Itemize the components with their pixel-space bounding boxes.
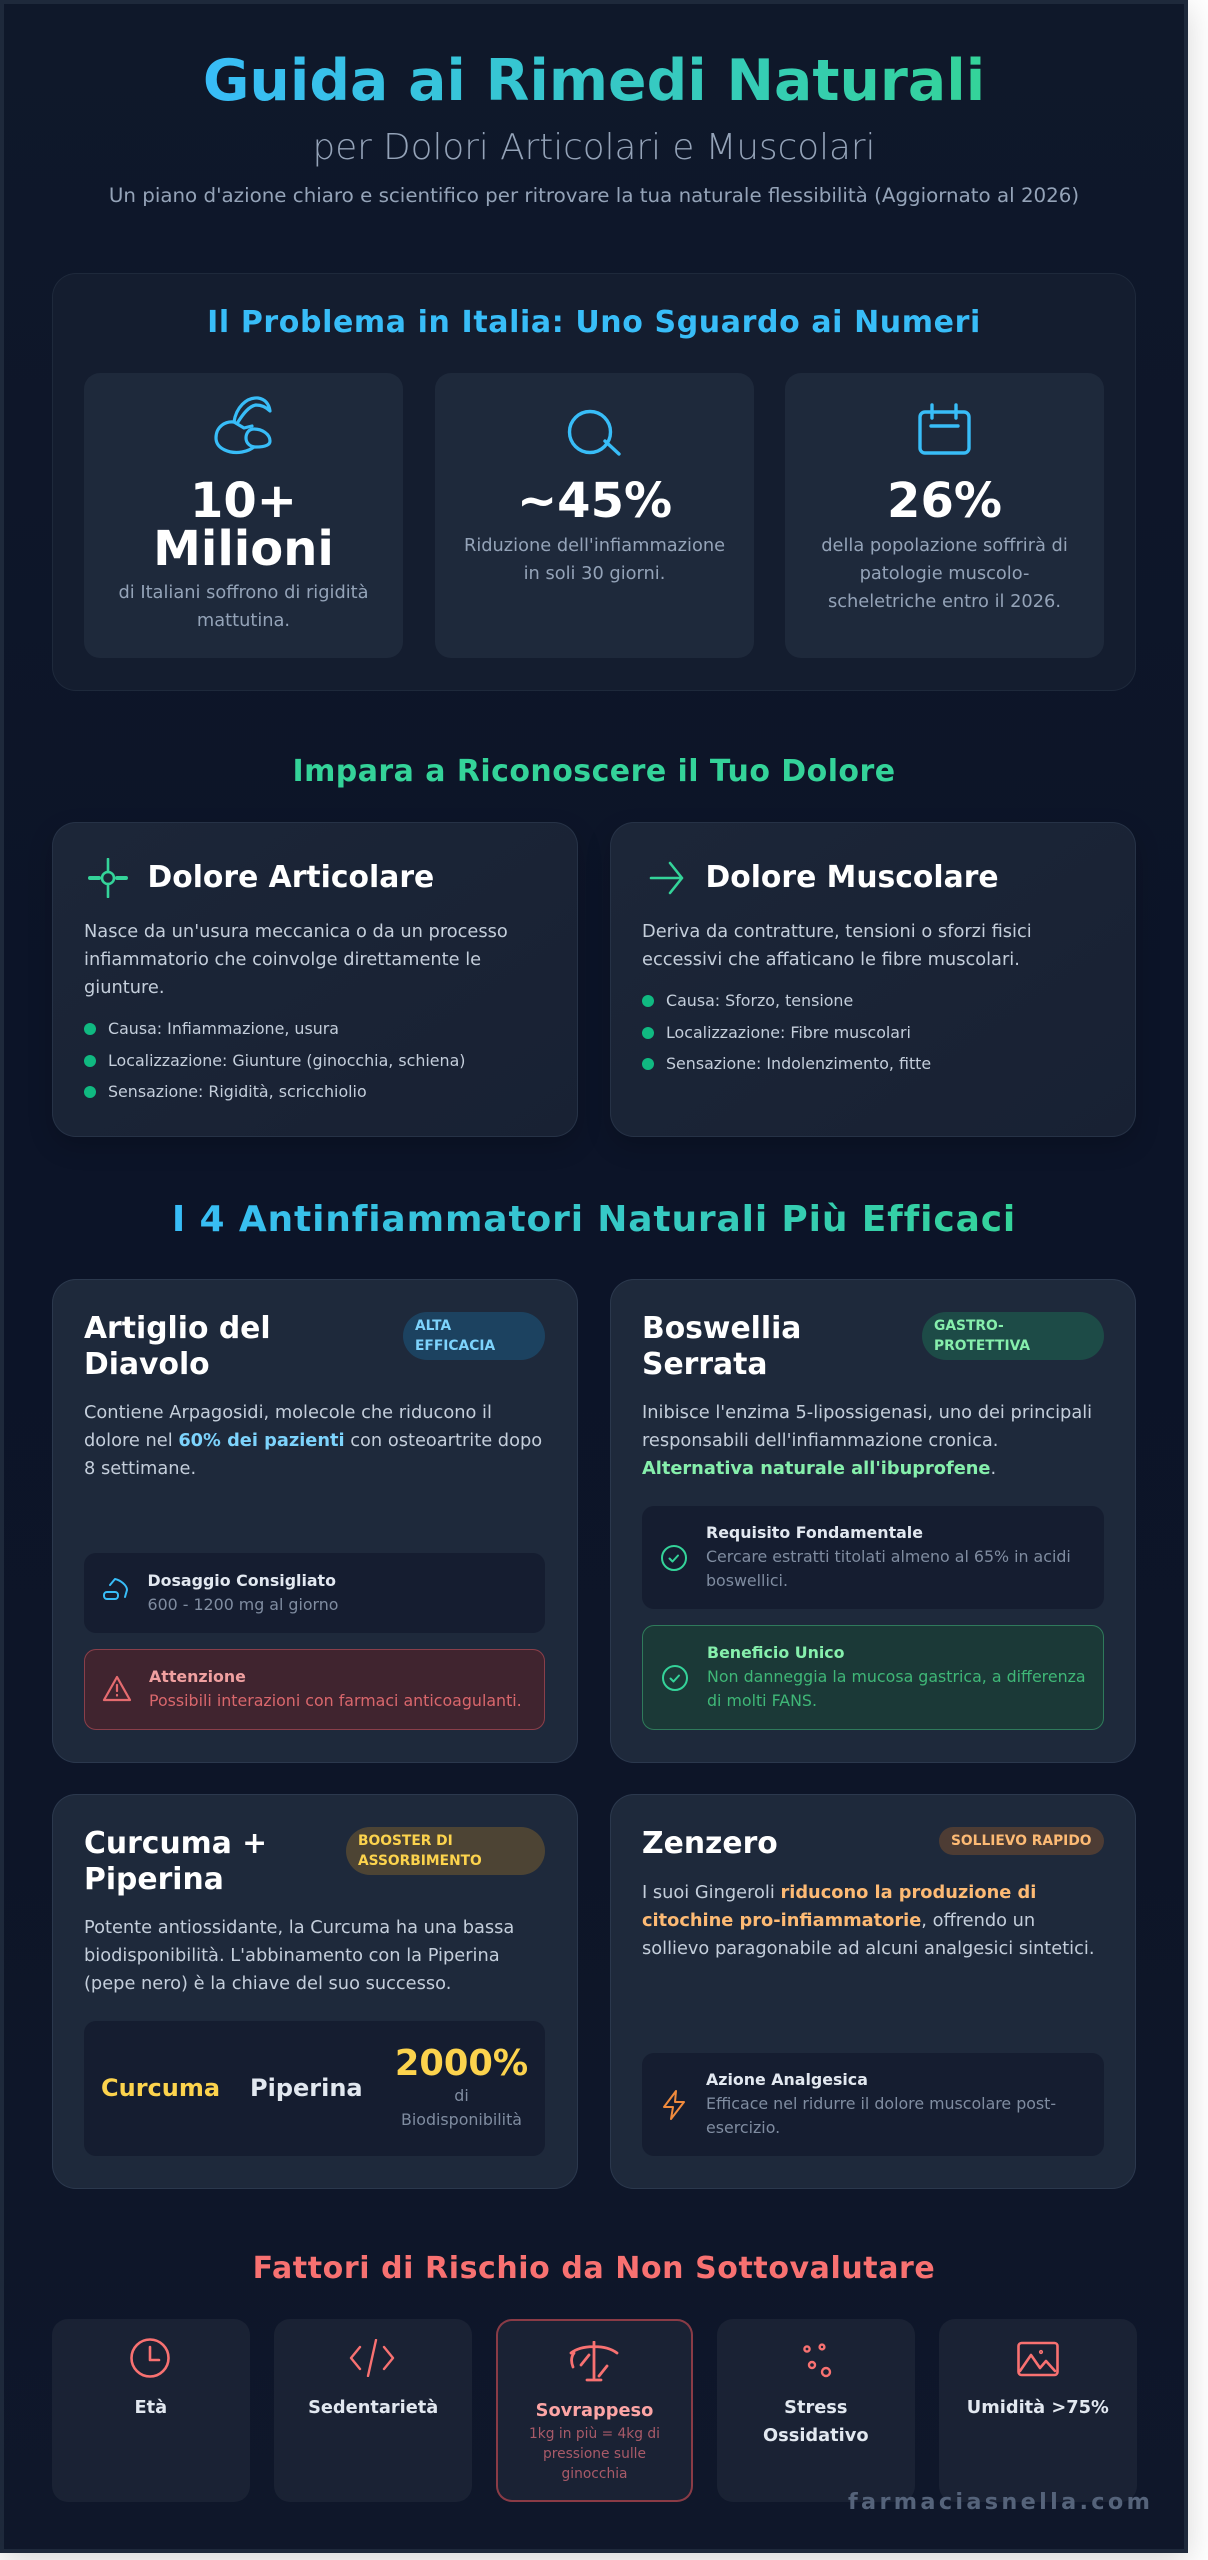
stat number: [153, 473, 334, 577]
bullet list: Causa: Infiammazione, usura: [108, 1019, 339, 1038]
panel: dolore articolare: [52, 822, 578, 1137]
stat card: 10+ milioni: [84, 373, 403, 658]
box text: Requisito Fondamentale: [706, 1523, 923, 1542]
panel: il problema in Italia: [52, 273, 1136, 691]
value: 2000%: 2000%: [395, 2043, 528, 2084]
box: azione analgesica: esercizio.: [706, 2118, 780, 2137]
box: dosaggio: 600 - 1200 mg al giorno: [148, 1595, 338, 1614]
note: 1kg in più = 4kg di: [529, 2426, 660, 2442]
watermark: farmaciasnella.com: [848, 2489, 1153, 2515]
badge: GASTRO-: [934, 1318, 1004, 1334]
card title: Serrata: [642, 1347, 768, 1382]
icon: warning: [102, 1676, 132, 1702]
box: requisito: [642, 1506, 1104, 1609]
stat card: 45%: [435, 373, 754, 658]
value caption: di: [454, 2086, 469, 2105]
risk card: sovrappeso: [496, 2319, 693, 2502]
icon: clock: [130, 2338, 170, 2378]
bullet list: Sensazione: Indolenzimento, fitte: [666, 1054, 931, 1073]
stat number: 26%: [887, 473, 1002, 529]
stat text: in soli 30 giorni.: [524, 563, 665, 584]
card text: I suoi Gingeroli riducono la produzione di: [642, 1882, 1036, 1903]
stat text: [821, 535, 1068, 612]
card title: Zenzero: [642, 1826, 778, 1861]
bullet list: Sensazione: Rigidità, scricchiolio: [108, 1082, 367, 1101]
badge: ASSORBIMENTO: [358, 1853, 482, 1869]
stat text: mattutina.: [197, 610, 290, 631]
box: azione analgesica: Efficace nel ridurre il dolore muscolare post-: [706, 2094, 1056, 2113]
stat text: patologie muscolo-: [860, 563, 1029, 584]
card title: Dolore Muscolare: [706, 860, 999, 895]
box: beneficio: di molti FANS.: [707, 1691, 817, 1710]
tagline: Un piano d'azione chiaro e scientifico per ritrovare la tua naturale flessibilità (Aggiornato al 2026): [109, 184, 1079, 207]
icon: scale: [570, 2341, 618, 2382]
label: curcuma: Curcuma: [101, 2074, 220, 2102]
stat number: ~45%: [517, 473, 672, 529]
icon: arrow: [650, 862, 684, 894]
label: [763, 2397, 869, 2446]
badge: BOOSTER DI: [358, 1833, 453, 1849]
box: sinergia: [84, 2021, 545, 2156]
panel: boswellia serrata: [610, 1279, 1136, 1763]
label: Sovrappeso: [536, 2400, 653, 2421]
card text: [84, 1917, 514, 1994]
panel: dolore muscolare: [610, 822, 1136, 1137]
badge: [346, 1827, 545, 1875]
stat card: 26%: [785, 373, 1104, 658]
icon: calendar: [918, 403, 971, 455]
risk card: stress ossidativo: [717, 2319, 915, 2502]
stat text: scheletriche entro il 2026.: [828, 591, 1061, 612]
card text: eccessivi che affaticano le fibre muscolari.: [642, 949, 1020, 970]
box: requisito: boswellici.: [706, 1571, 788, 1590]
icon: code: [350, 2339, 394, 2377]
panel: zenzero: [610, 1794, 1136, 2189]
box: attenzione: [84, 1649, 545, 1730]
heading: il problema: Il Problema in Italia: Uno Sguardo ai Numeri: [207, 305, 981, 340]
box text: Attenzione: [149, 1667, 246, 1686]
value caption: Biodisponibilità: [401, 2110, 522, 2129]
badge: EFFICACIA: [415, 1338, 495, 1354]
badge: [939, 1827, 1104, 1855]
icon: dose: [103, 1578, 128, 1600]
note: pressione sulle: [543, 2446, 646, 2462]
card text: citochine pro-infiammatorie, offrendo un: [642, 1910, 1035, 1931]
label: Età: [134, 2397, 167, 2418]
card title: Piperina: [84, 1862, 224, 1897]
badge: [922, 1312, 1104, 1360]
card text: [84, 921, 508, 998]
panel: curcuma + piperina: [52, 1794, 578, 2189]
card text: Inibisce l'enzima 5-lipossigenasi, uno dei principali: [642, 1402, 1092, 1423]
label: piperina: Piperina: [250, 2074, 363, 2102]
card text: (pepe nero) è la chiave del suo successo.: [84, 1973, 451, 1994]
card text: Contiene Arpagosidi, molecole che riducono il: [84, 1402, 492, 1423]
box text: Azione Analgesica: [706, 2070, 868, 2089]
stat text: [464, 535, 725, 584]
card text: Alternativa naturale all'ibuprofene.: [642, 1458, 996, 1479]
label: Umidità >75%: [967, 2397, 1109, 2418]
subtitle: per Dolori Articolari e Muscolari: [313, 127, 875, 168]
card title: Diavolo: [84, 1347, 210, 1382]
icon: check: [661, 1545, 687, 1571]
note: [529, 2426, 660, 2482]
badge: [403, 1312, 545, 1360]
stat text: Riduzione dell'infiammazione: [464, 535, 725, 556]
card text: [642, 921, 1032, 970]
icon: image: [1017, 2342, 1059, 2376]
risk card: umidità: [939, 2319, 1137, 2502]
badge: PROTETTIVA: [934, 1338, 1030, 1354]
card title: Curcuma +: [84, 1826, 267, 1861]
card title: Artiglio del: [84, 1311, 271, 1346]
card text: dolore nel 60% dei pazienti con osteoartrite dopo: [84, 1430, 542, 1451]
title: Guida ai Rimedi Naturali: [203, 48, 985, 114]
card title: [84, 1311, 271, 1382]
label: Stress: [784, 2397, 847, 2418]
card title: Dolore Articolare: [148, 860, 434, 895]
badge: SOLLIEVO RAPIDO: [951, 1833, 1092, 1849]
icon: joint: [214, 396, 272, 454]
badge: ALTA: [415, 1318, 451, 1334]
card title: [84, 1826, 267, 1897]
card text: [642, 1402, 1092, 1479]
stat text: [118, 582, 369, 631]
heading: impara a riconoscere: Impara a Riconoscere il Tuo Dolore: [292, 754, 896, 789]
card title: [642, 1311, 801, 1382]
box: attenzione: Possibili interazioni con farmaci anticoagulanti.: [149, 1691, 522, 1710]
card text: Nasce da un'usura meccanica o da un processo: [84, 921, 508, 942]
box text: Beneficio Unico: [707, 1643, 845, 1662]
bullet list: Causa: Sforzo, tensione: [666, 991, 853, 1010]
card text: Deriva da contratture, tensioni o sforzi fisici: [642, 921, 1032, 942]
stat text: di Italiani soffrono di rigidità: [118, 582, 369, 603]
card text: [642, 1882, 1094, 1959]
stat text: della popolazione soffrirà di: [821, 535, 1068, 556]
heading: i 4 antinfiammatori: I 4 Antinfiammatori Naturali Più Efficaci: [172, 1199, 1016, 1240]
bullet list: Localizzazione: Giunture (ginocchia, schiena): [108, 1051, 465, 1070]
bullet list: [642, 991, 931, 1073]
bullet list: [84, 1019, 465, 1101]
risk card: età: [52, 2319, 250, 2502]
box text: Dosaggio Consigliato: [148, 1571, 336, 1590]
value caption: [401, 2086, 522, 2129]
card text: sollievo paragonabile ad alcuni analgesici sintetici.: [642, 1938, 1094, 1959]
card text: giunture.: [84, 977, 165, 998]
box: azione analgesica: [642, 2053, 1104, 2156]
card text: responsabili dell'infiammazione cronica.: [642, 1430, 998, 1451]
icon: check: [662, 1665, 688, 1691]
label: Ossidativo: [763, 2425, 869, 2446]
risk card: sedentarietà: [274, 2319, 472, 2502]
card text: [84, 1402, 542, 1479]
stat number: Milioni: [153, 521, 334, 577]
panel: artiglio del diavolo: [52, 1279, 578, 1763]
icon: magnifier: [568, 410, 621, 456]
icon: joint cross: [88, 858, 128, 898]
card text: Potente antiossidante, la Curcuma ha una bassa: [84, 1917, 514, 1938]
icon: bolt: [663, 2090, 685, 2120]
card text: 8 settimane.: [84, 1458, 196, 1479]
stat number: 10+: [190, 473, 297, 529]
label: Sedentarietà: [308, 2397, 438, 2418]
icon: particles: [803, 2343, 832, 2378]
heading: fattori di rischio: Fattori di Rischio da Non Sottovalutare: [253, 2251, 935, 2286]
box: beneficio: Non danneggia la mucosa gastrica, a differenza: [707, 1667, 1086, 1686]
box: dosaggio: [84, 1553, 545, 1633]
bullet list: Localizzazione: Fibre muscolari: [666, 1023, 911, 1042]
box: beneficio: [642, 1625, 1104, 1730]
card text: infiammatorio che coinvolge direttamente le: [84, 949, 481, 970]
card text: biodisponibilità. L'abbinamento con la Piperina: [84, 1945, 500, 1966]
box: requisito: Cercare estratti titolati almeno al 65% in acidi: [706, 1547, 1071, 1566]
note: ginocchia: [562, 2466, 627, 2482]
card title: Boswellia: [642, 1311, 801, 1346]
